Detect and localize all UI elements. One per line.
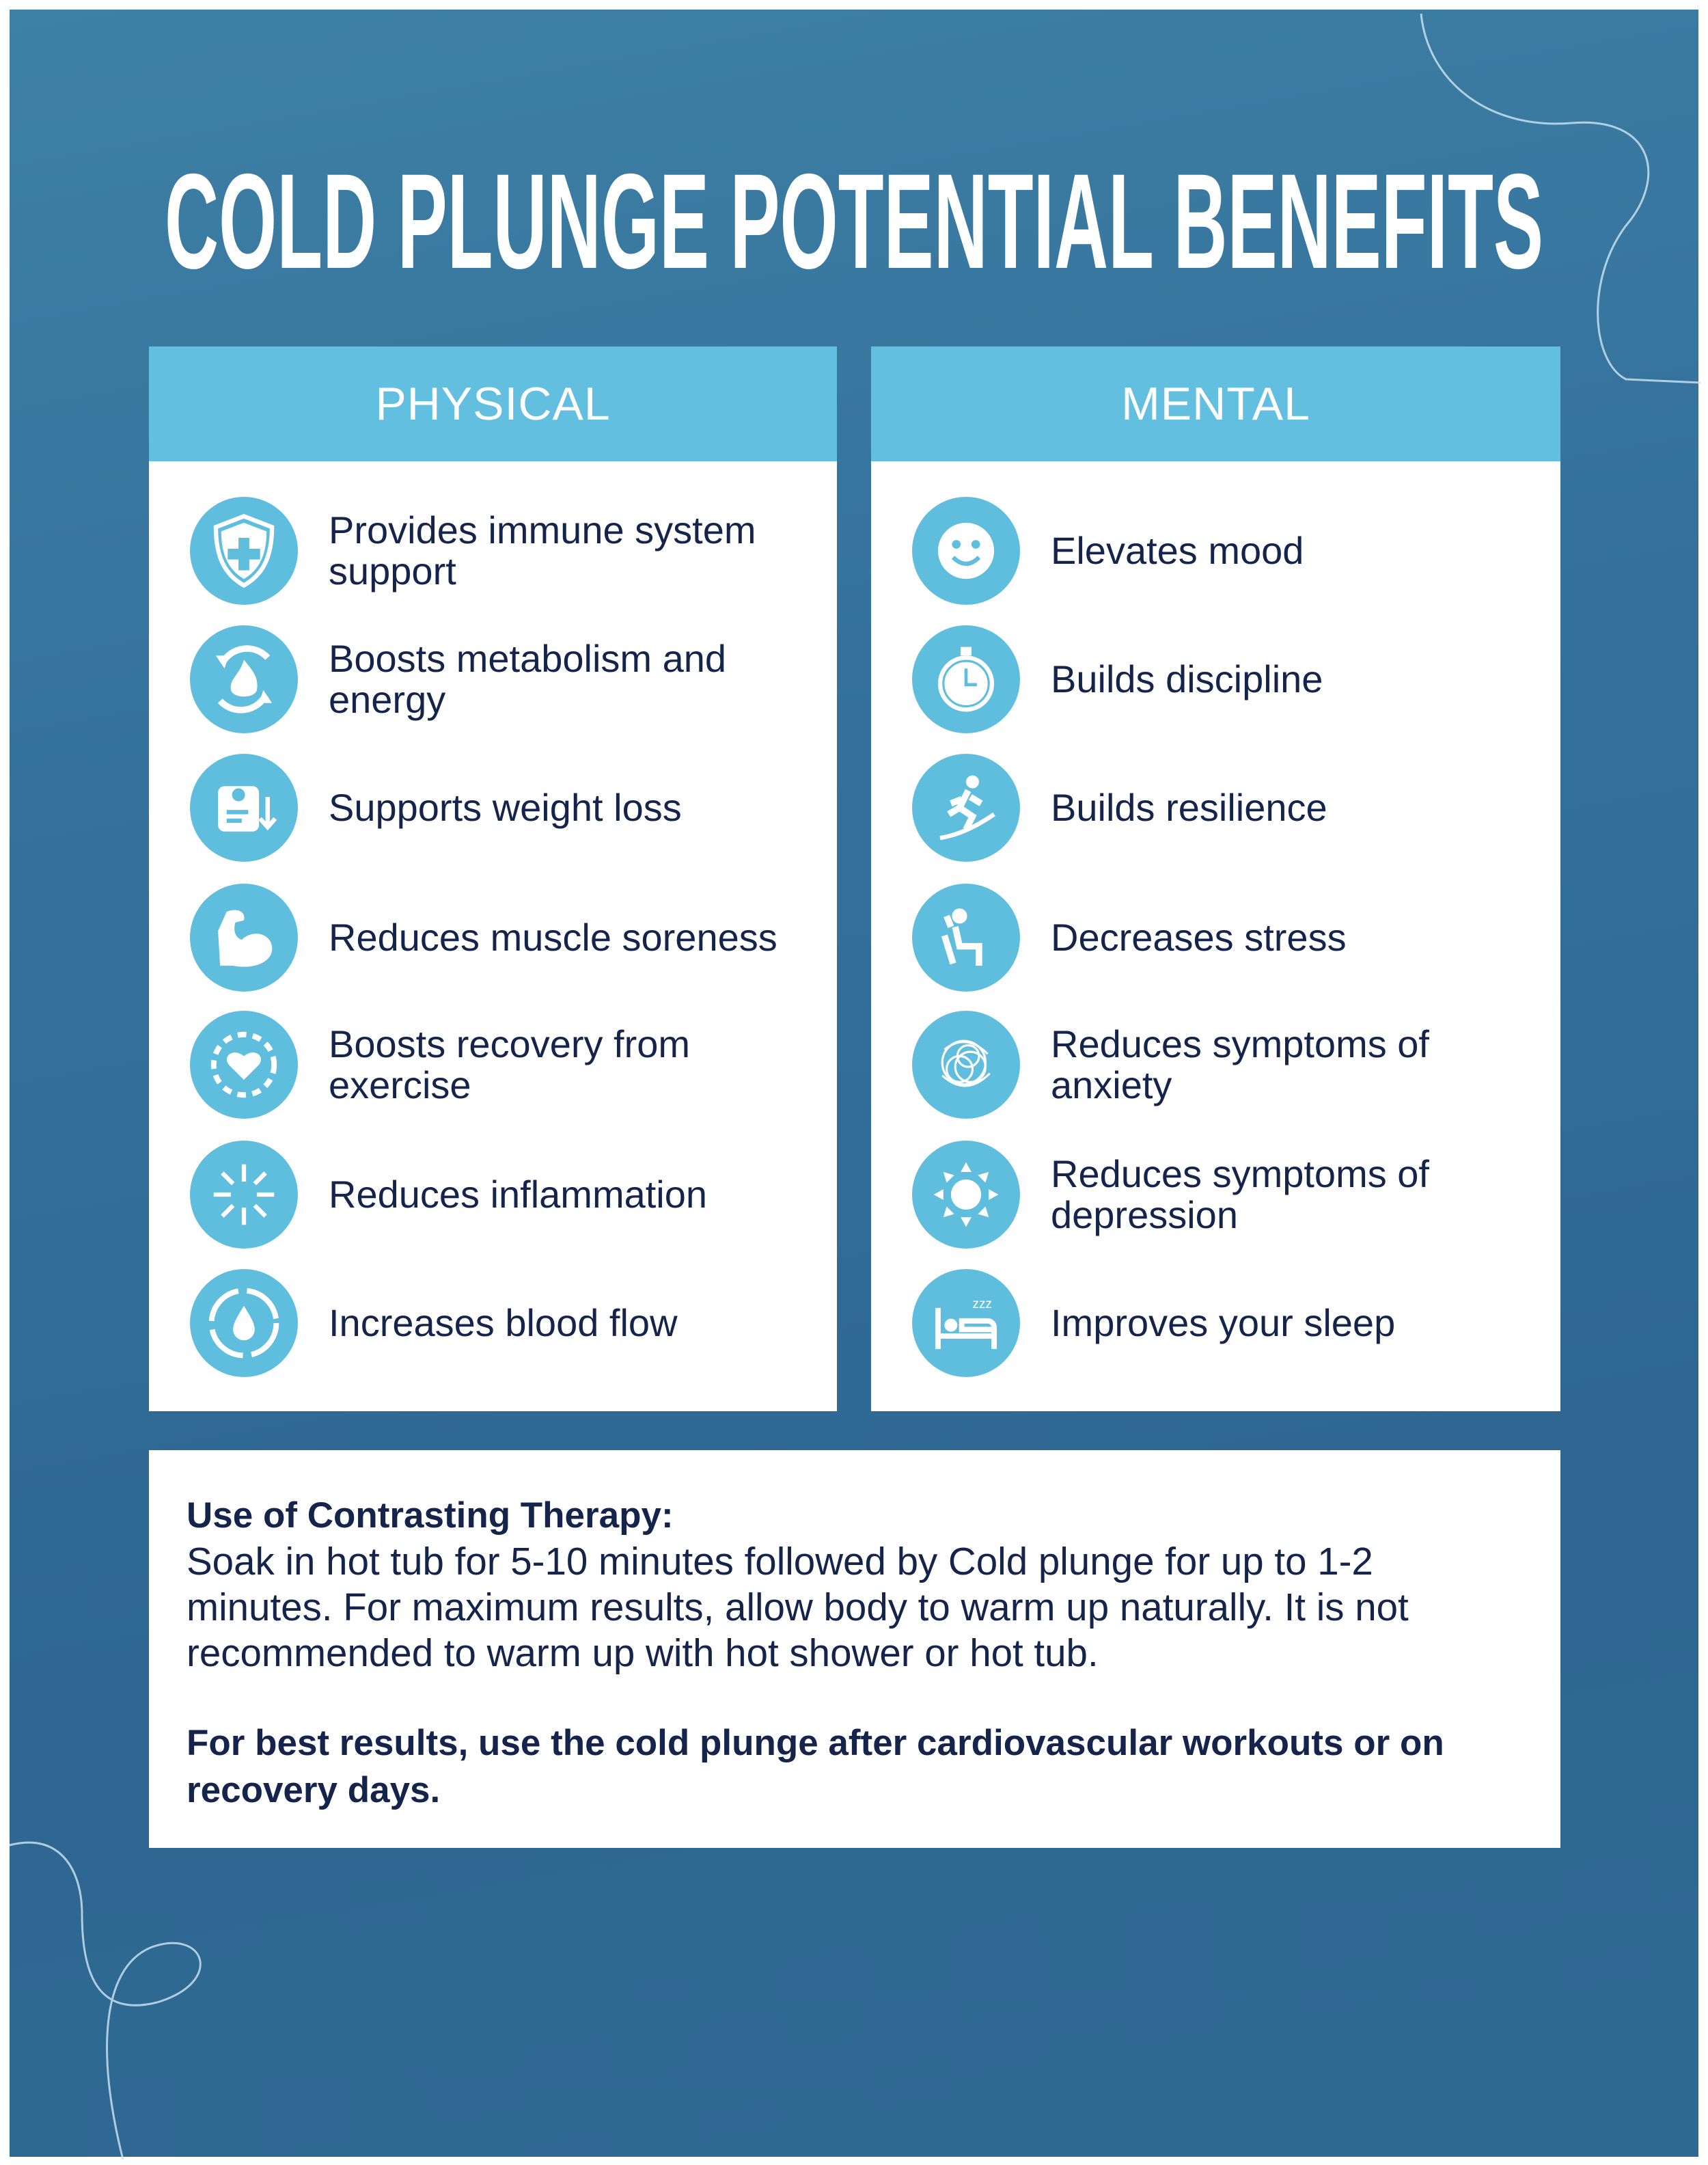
item: mood: Elevates mood xyxy=(1051,529,1304,572)
item: inflammation: Reduces inflammation xyxy=(329,1173,707,1216)
item: stress xyxy=(912,884,1347,992)
item: metabolism: energy xyxy=(329,678,445,721)
item: immune: support xyxy=(329,549,456,593)
item: resilience: Builds resilience xyxy=(1051,786,1327,829)
text block: contrasting therapy xyxy=(149,1450,1560,1848)
text block: contrasting therapy: Use of Contrasting Therapy: xyxy=(187,1495,674,1536)
item: anxiety: anxiety xyxy=(1051,1063,1172,1106)
item: metabolism: Boosts metabolism and xyxy=(329,637,726,680)
header: physical: PHYSICAL xyxy=(375,378,611,430)
item: weight xyxy=(190,754,682,862)
item: depression: Reduces symptoms of xyxy=(1051,1152,1429,1195)
item: anxiety: Reduces symptoms of xyxy=(1051,1022,1429,1065)
item: anxiety xyxy=(912,1011,1429,1119)
item: metabolism xyxy=(190,625,726,733)
item: immune: Provides immune system xyxy=(329,508,756,552)
item: recovery: exercise xyxy=(329,1063,471,1106)
item: recovery: Boosts recovery from xyxy=(329,1022,690,1065)
item: recovery xyxy=(190,1011,690,1119)
item: stress: Decreases stress xyxy=(1051,916,1347,959)
item: sleep: Improves your sleep xyxy=(1051,1301,1395,1344)
item: discipline xyxy=(912,625,1323,733)
item: muscle: Reduces muscle soreness xyxy=(329,916,777,959)
item: blood flow: Increases blood flow xyxy=(329,1301,678,1344)
item: depression: depression xyxy=(1051,1193,1238,1236)
item: weight: Supports weight loss xyxy=(329,786,682,829)
text block: contrasting therapy: recommended to warm up with hot shower or hot tub. xyxy=(187,1631,1099,1674)
item: blood flow xyxy=(190,1269,678,1377)
panel: mental xyxy=(871,346,1560,1411)
item: mood xyxy=(912,497,1304,605)
header: mental xyxy=(871,346,1560,461)
header: mental: MENTAL xyxy=(1121,378,1310,430)
text block: contrasting therapy: For best results, use the cold plunge after cardiovascular workouts or on xyxy=(187,1723,1444,1763)
text block: contrasting therapy: recovery days. xyxy=(187,1770,440,1810)
item: resilience xyxy=(912,754,1327,862)
item: sleep: zzz xyxy=(972,1297,992,1311)
item: muscle xyxy=(190,884,777,992)
item: discipline: Builds discipline xyxy=(1051,657,1323,700)
item: depression xyxy=(912,1141,1429,1249)
panel: physical xyxy=(149,346,837,1411)
item: sleep xyxy=(912,1269,1395,1377)
item: inflammation xyxy=(190,1141,707,1249)
text block: contrasting therapy: Soak in hot tub for 5-10 minutes followed by Cold plunge for up to 1-2 xyxy=(187,1540,1373,1583)
item: immune xyxy=(190,497,756,605)
header: physical xyxy=(149,346,837,461)
text block: contrasting therapy: minutes. For maximum results, allow body to warm up naturally. It is not xyxy=(187,1585,1409,1629)
